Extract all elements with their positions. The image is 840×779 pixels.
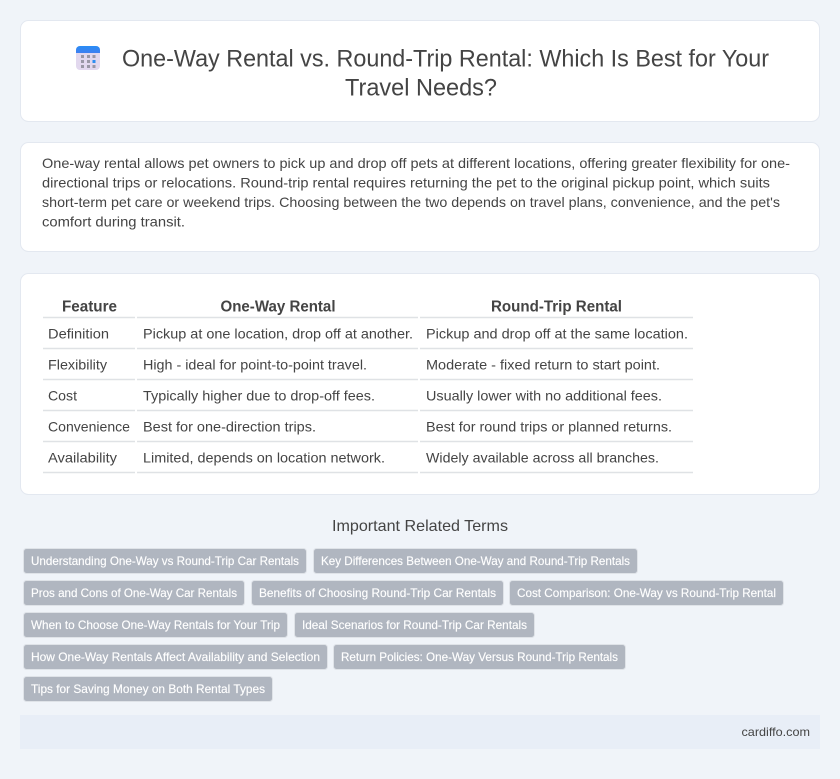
table row: definition: Pickup at one location, drop off at another. — [143, 326, 413, 342]
title: One-Way Rental vs. Round-Trip Rental: Which Is Best for Your — [122, 46, 769, 72]
tag: Understanding One-Way vs Round-Trip Car Rentals — [31, 554, 299, 568]
title: Travel Needs? — [345, 74, 497, 102]
table row: flexibility — [43, 356, 693, 380]
tag — [24, 580, 244, 606]
panel: comparison table — [20, 274, 820, 494]
panel: summary paragraph — [20, 142, 820, 252]
tag: Benefits of Choosing Round-Trip Car Rentals — [259, 586, 496, 600]
table row: cost — [43, 388, 693, 410]
tag: Cost Comparison: One-Way vs Round-Trip Rental — [517, 586, 776, 600]
table row: convenience — [43, 418, 693, 442]
text block: summary: comfort during transit. — [42, 214, 185, 230]
table header — [43, 298, 693, 318]
tag — [510, 580, 784, 606]
table header: One-Way Rental — [220, 298, 336, 316]
footer: cardiffo.com — [742, 725, 810, 739]
table row: cost: Typically higher due to drop-off fees. — [143, 388, 375, 404]
text block: summary: directional trips or relocations. Round-trip rental requires returning the pet to the original pickup point, which suits — [42, 174, 770, 190]
table row: convenience: Best for round trips or planned returns. — [426, 418, 672, 434]
table row: convenience: Convenience — [48, 418, 130, 434]
table row: availability — [43, 450, 693, 472]
tag — [252, 580, 504, 606]
table row: availability: Widely available across all branches. — [426, 450, 659, 466]
table row: convenience: Best for one-direction trips. — [143, 418, 316, 434]
tag — [294, 612, 534, 638]
tag — [24, 548, 306, 574]
text block: summary — [42, 155, 790, 230]
tag: Tips for Saving Money on Both Rental Types — [31, 682, 265, 696]
table row: definition — [43, 326, 693, 348]
tag — [314, 548, 638, 574]
table row: availability: Limited, depends on location network. — [143, 450, 385, 466]
table row: flexibility: Moderate - fixed return to start point. — [426, 356, 660, 372]
table row: availability: Availability — [48, 450, 117, 466]
icon: calendar — [76, 46, 100, 70]
title — [122, 46, 769, 102]
tag group: related terms — [24, 548, 784, 702]
heading: important related terms: Important Related Terms — [332, 518, 508, 535]
tag — [24, 676, 272, 702]
table row: flexibility: High - ideal for point-to-point travel. — [143, 356, 367, 372]
tag: Pros and Cons of One-Way Car Rentals — [31, 586, 237, 600]
tag: When to Choose One-Way Rentals for Your Trip — [31, 618, 280, 632]
tag: Ideal Scenarios for Round-Trip Car Rentals — [302, 618, 527, 632]
table row: cost: Cost — [48, 388, 77, 404]
tag — [24, 644, 328, 670]
table row: cost: Usually lower with no additional fees. — [426, 388, 662, 404]
table row: definition: Definition — [48, 326, 109, 342]
tag: Return Policies: One-Way Versus Round-Trip Rentals — [341, 650, 618, 664]
tag: Key Differences Between One-Way and Round-Trip Rentals — [321, 554, 630, 568]
text block: summary: One-way rental allows pet owners to pick up and drop off pets at different locations, offering greater flexibility for one- — [42, 155, 790, 171]
tag — [334, 644, 626, 670]
table header: Round-Trip Rental — [491, 298, 622, 316]
footer — [20, 715, 820, 749]
text block: summary: short-term pet care or weekend trips. Choosing between the two depends on travel plans, convenience, and the pet's — [42, 194, 780, 210]
panel: title card — [20, 20, 820, 122]
tag: How One-Way Rentals Affect Availability and Selection — [31, 650, 320, 664]
table row: flexibility: Flexibility — [48, 356, 107, 372]
table header: Feature — [62, 298, 117, 316]
tag — [24, 612, 288, 638]
table row: definition: Pickup and drop off at the same location. — [426, 326, 688, 342]
